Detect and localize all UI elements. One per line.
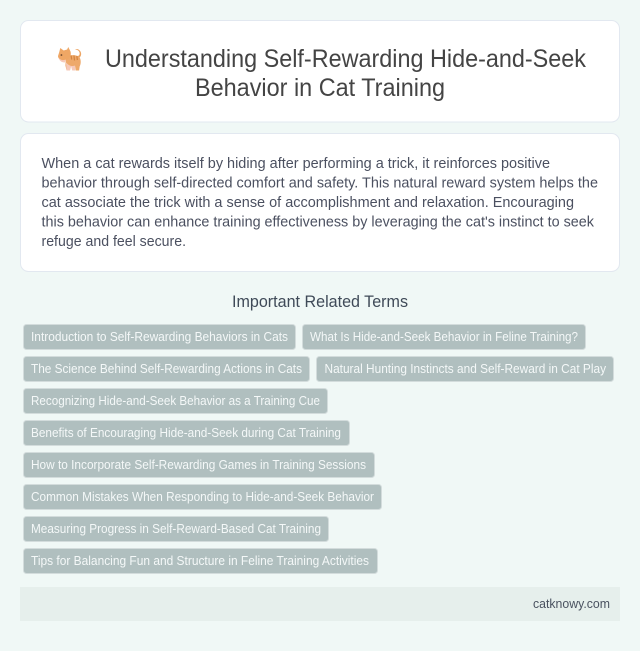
panel: description xyxy=(20,134,620,272)
title text xyxy=(105,45,586,102)
title panel xyxy=(20,20,620,122)
tag: How to Incorporate Self-Rewarding Games in Training Sessions xyxy=(31,457,366,472)
tag: Recognizing Hide-and-Seek Behavior as a Training Cue xyxy=(31,393,320,408)
description text: cat associate the trick with a sense of accomplishment and relaxation. Encouraging xyxy=(42,194,574,211)
tag xyxy=(24,356,310,382)
tag xyxy=(24,420,350,446)
tag: Tips for Balancing Fun and Structure in Feline Training Activities xyxy=(31,553,369,568)
tag: The Science Behind Self-Rewarding Actions in Cats xyxy=(31,361,302,376)
tag xyxy=(24,388,328,414)
title text: Understanding Self-Rewarding Hide-and-Seek xyxy=(105,45,586,73)
description text: When a cat rewards itself by hiding after performing a trick, it reinforces positive xyxy=(42,155,550,172)
tag xyxy=(24,452,374,478)
description text: refuge and feel secure. xyxy=(42,233,186,250)
tag xyxy=(24,516,328,542)
description text: this behavior can enhance training effectiveness by leveraging the cat's instinct to seek xyxy=(42,214,594,230)
tag xyxy=(24,324,296,350)
tag xyxy=(316,356,614,382)
tag xyxy=(24,548,378,574)
tag xyxy=(24,484,382,510)
tag: What Is Hide-and-Seek Behavior in Feline Training? xyxy=(310,329,578,344)
description text xyxy=(42,155,598,250)
heading: related terms: Important Related Terms xyxy=(232,293,408,311)
tag: Introduction to Self-Rewarding Behaviors in Cats xyxy=(31,329,288,344)
tag xyxy=(302,324,586,350)
icon: cat xyxy=(58,47,81,70)
title text: Behavior in Cat Training xyxy=(195,74,445,102)
description text: behavior through self-directed comfort and safety. This natural reward system helps the xyxy=(42,174,598,192)
tag: Common Mistakes When Responding to Hide-and-Seek Behavior xyxy=(31,489,375,504)
tag: Measuring Progress in Self-Reward-Based Cat Training xyxy=(31,521,321,536)
footer site name: catknowy.com xyxy=(533,596,610,611)
panel: related term tags xyxy=(24,324,614,574)
footer xyxy=(20,587,620,621)
tag: Benefits of Encouraging Hide-and-Seek during Cat Training xyxy=(31,425,341,440)
tag: Natural Hunting Instincts and Self-Reward in Cat Play xyxy=(324,361,607,376)
